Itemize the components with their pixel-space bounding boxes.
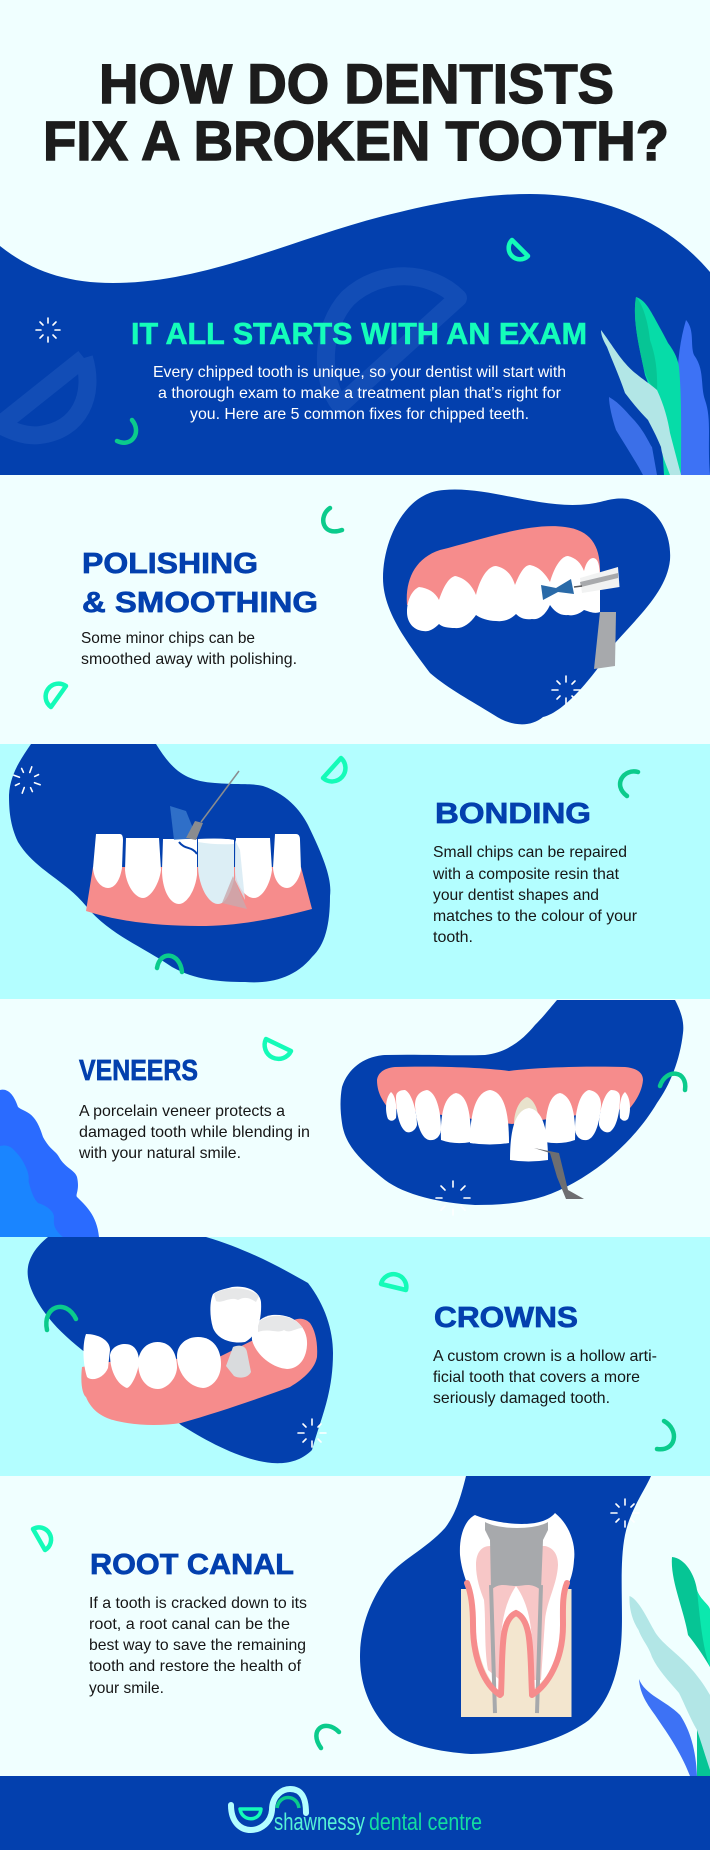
icon: arc [620,771,638,796]
teeth [83,1334,221,1389]
text block: best way to save the remaining [89,1637,306,1654]
text block [78,1103,310,1162]
heading: VENEERS [79,1055,198,1087]
icon: sparkle [552,676,580,704]
text block: ficial tooth that covers a more [433,1369,640,1386]
title [43,52,669,172]
gum [377,1067,643,1124]
text block: a thorough exam to make a treatment plan that’s right for [158,385,562,402]
icon: sparkle [298,1419,326,1447]
text block: matches to the colour of your [433,908,638,925]
tweezers [534,1148,584,1199]
text block: Small chips can be repaired [433,844,627,861]
text block: tooth. [433,929,473,946]
back molar [252,1315,307,1369]
icon: arc [323,508,342,531]
title: HOW DO DENTISTS [99,52,614,115]
panel: exam intro [0,194,710,475]
icon: arc [660,1074,685,1090]
tooth cross section [460,1513,574,1717]
heading: ROOT CANAL [90,1549,294,1581]
text block: seriously damaged tooth. [433,1390,610,1407]
leaves [601,297,710,475]
title: FIX A BROKEN TOOTH? [43,109,669,172]
icon: arc [46,1307,76,1330]
text block [81,630,297,668]
text block: your dentist shapes and [433,887,599,904]
text block: tooth and restore the health of [89,1658,302,1675]
text block: A custom crown is a hollow arti- [433,1348,657,1365]
icon: half moon [381,1274,406,1290]
composite resin tooth [198,839,247,909]
bonding tool [170,771,239,854]
panel: root canal [33,1476,710,1776]
leaves [629,1557,710,1776]
inner root white arch [503,1596,533,1690]
heading: CROWNS [434,1302,578,1334]
tooth stump [226,1346,251,1378]
icon: half moon [323,758,345,781]
text block: If a tooth is cracked down to its [89,1595,307,1612]
text block [433,1348,657,1407]
blob [360,1476,651,1754]
icon: sparkle [36,318,60,342]
icon: sparkle [9,762,45,798]
text block: you. Here are 5 common fixes for chipped teeth. [190,406,529,423]
icon: half moon [33,1527,51,1550]
heading: & SMOOTHING [82,587,318,619]
text block [432,844,638,946]
bone [461,1589,572,1717]
faint tooth shapes [0,276,458,435]
text block [153,364,566,423]
text block: A porcelain veneer protects a [79,1103,285,1120]
panel: bonding [9,744,638,982]
heading [82,548,318,619]
text block: Every chipped tooth is unique, so your dentist will start with [153,364,566,381]
blob [9,744,330,982]
icon: half moon [509,240,528,259]
gum [407,526,600,605]
icon: half moon [265,1039,291,1059]
text block: with your natural smile. [78,1145,241,1162]
text block [89,1595,307,1697]
gutta percha [485,1522,548,1590]
enamel and root [460,1513,574,1690]
gum [86,867,312,926]
blob [383,490,670,724]
teeth [407,556,600,631]
gum [81,1319,317,1425]
logo: shawnessy [274,1809,365,1836]
icon: half moon [46,684,66,707]
heading: BONDING [435,798,591,830]
teeth left [386,1090,509,1144]
logo: dental centre [369,1809,482,1836]
polishing tool [541,567,620,669]
text block: root, a root canal can be the [89,1616,290,1633]
text block: smoothed away with polishing. [81,651,297,668]
veneer [510,1108,548,1162]
prepared tooth [514,1097,539,1124]
text block: Some minor chips can be [81,630,255,647]
teeth [93,834,301,904]
crown [210,1287,261,1342]
icon: sparkle [436,1181,470,1215]
blob [28,1237,333,1463]
heading: IT ALL STARTS WITH AN EXAM [131,316,587,351]
panel: polishing and smoothing [46,490,670,724]
text block: your smile. [89,1680,164,1697]
teeth right [545,1090,630,1143]
panel: crowns [28,1237,674,1463]
heading: POLISHING [82,548,258,580]
wave background [0,194,710,475]
text block: damaged tooth while blending in [79,1124,310,1141]
text block: with a composite resin that [432,866,620,883]
icon: arc [657,1421,674,1449]
blob [340,1000,683,1205]
pulp [476,1546,558,1680]
scalloped shape [0,1090,99,1237]
panel: veneers [0,1000,685,1237]
icon: sparkle [611,1499,639,1527]
logo [231,1789,482,1836]
inner arch bone [501,1613,532,1696]
footer [0,1776,710,1850]
icon: arc [316,1726,339,1748]
gum tissue [467,1583,567,1695]
icon: arc [117,420,136,443]
icon: arc [157,956,182,972]
